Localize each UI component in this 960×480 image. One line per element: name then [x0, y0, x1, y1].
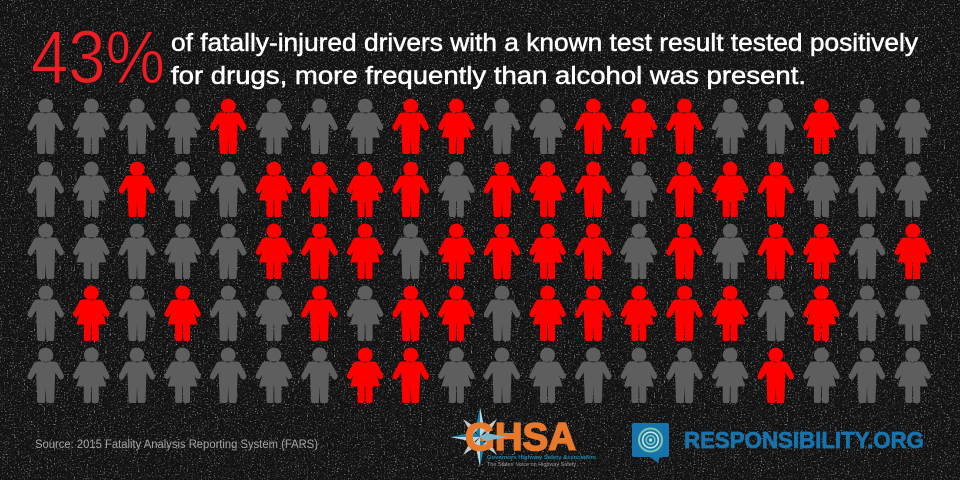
logo: Responsibility.org	[632, 423, 924, 463]
headline text: of fatally-injured drivers with a known test result tested positively	[171, 29, 919, 57]
icon: compass star	[450, 407, 497, 467]
headline text: for drugs, more frequently than alcohol was present.	[171, 62, 806, 90]
pictogram row 4	[27, 286, 931, 341]
association tagline: The States' Voice on Highway Safety	[487, 462, 576, 468]
big statistic: 43%: 43%	[31, 15, 165, 99]
pictogram row 1	[27, 99, 931, 154]
icon: speech bubble target	[632, 423, 669, 463]
pictogram row 3	[27, 224, 931, 279]
GHSA wordmark: GHSA	[465, 416, 576, 459]
pictogram row 5	[27, 348, 931, 403]
Responsibility.org wordmark: RESPONSIBILITY.ORG	[684, 427, 924, 453]
headline text	[171, 29, 919, 90]
association name: Governors Highway Safety Association	[487, 455, 597, 461]
logo: GHSA	[450, 407, 597, 468]
source note: Source: 2015 Fatality Analysis Reporting System (FARS)	[35, 439, 318, 451]
icon: star right point over the wordmark	[479, 433, 508, 441]
pictogram row 2	[27, 162, 931, 217]
